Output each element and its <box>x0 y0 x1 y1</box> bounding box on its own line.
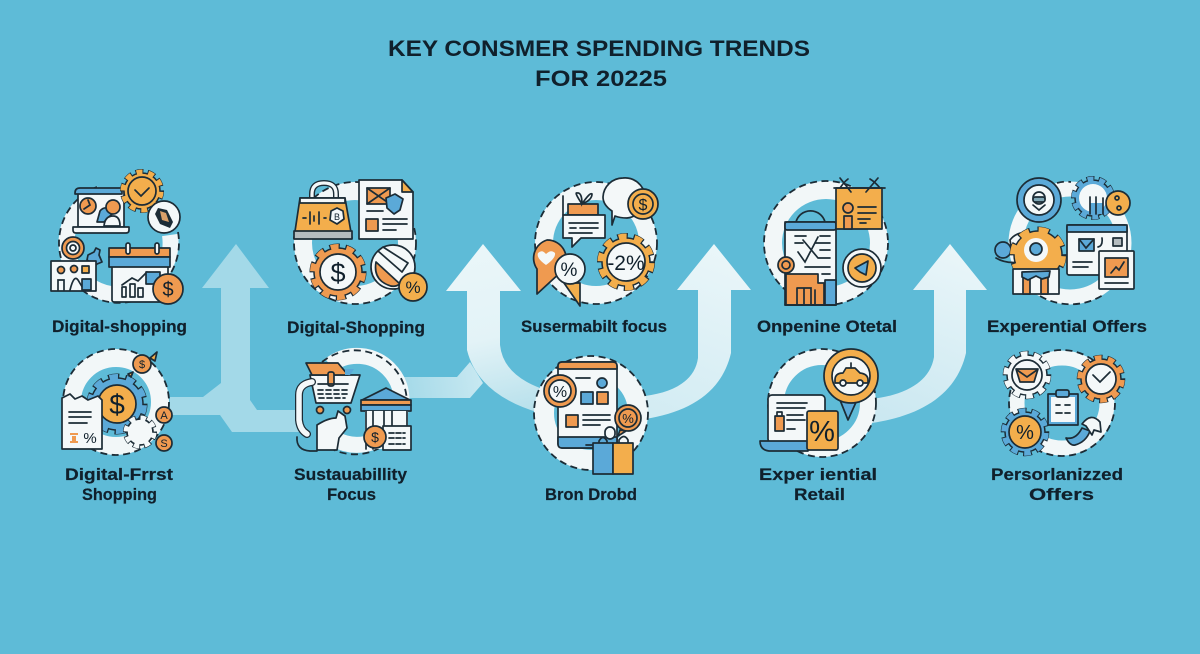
icon: coin: $ <box>371 429 379 445</box>
icon: percent card <box>807 411 838 450</box>
label <box>294 466 408 504</box>
icon: blue gear with percent: % <box>1016 422 1034 444</box>
panel: bottom 5 Personalized Offers <box>991 350 1123 504</box>
icon: heart bubble <box>534 240 566 294</box>
icon: percent badge: % <box>553 384 567 401</box>
ring <box>534 356 648 470</box>
icon: blue gear with coin <box>90 377 144 431</box>
icon: disc <box>843 249 881 287</box>
icon: percent coin <box>399 273 427 301</box>
panel: bottom 1 Digital-First Shopping <box>62 349 174 504</box>
panel: top 4 Onpenine Otetal <box>757 178 897 336</box>
icon: bank <box>361 388 411 449</box>
label: Experential Offers <box>987 318 1147 336</box>
ring <box>1009 350 1115 456</box>
ring <box>1016 182 1124 304</box>
icon: shopping bag <box>294 198 352 239</box>
icon: white disc <box>148 201 180 233</box>
label <box>991 466 1123 504</box>
icon: blue gear with percent <box>1004 411 1046 453</box>
icon: gift note <box>563 193 605 247</box>
icon: orange gear <box>1013 230 1063 280</box>
icon: laptop <box>760 395 825 451</box>
icon: white box with columns <box>1013 269 1059 294</box>
icon: blue gear with coin: $ <box>109 389 125 420</box>
icon: bag handle <box>312 183 336 200</box>
icon: receipt: % <box>83 430 97 447</box>
icon: coin <box>628 189 658 219</box>
title: FOR 20225 <box>535 66 667 91</box>
label: Digital-shopping <box>52 318 187 336</box>
label: Onpenine Otetal <box>757 318 897 336</box>
ring <box>294 182 416 304</box>
ring <box>768 349 876 457</box>
icon: percent bubble: % <box>622 411 634 426</box>
label: Susermabilt focus <box>521 318 667 336</box>
icon: outline gear <box>1074 179 1112 217</box>
ring <box>764 181 888 305</box>
panel: top 1 Digital-shopping <box>51 172 187 336</box>
label <box>759 466 877 504</box>
icon: handle base <box>297 437 317 451</box>
panel: bottom 3 Bron Drobd <box>534 356 648 504</box>
icon: shopping bags <box>593 427 633 474</box>
panel: top 5 Experential Offers <box>987 178 1147 336</box>
icon: helmet disc <box>371 245 415 289</box>
icon: badge <box>1017 178 1061 222</box>
icon: hand <box>317 411 347 450</box>
arrow: first up arrow with branches <box>170 244 300 432</box>
icon: white gear with envelope <box>1006 354 1048 396</box>
icon: calendar: $ <box>162 279 174 301</box>
icon: wrench <box>1066 417 1101 445</box>
icon: tablet <box>558 362 617 448</box>
label: Digital-Shopping <box>287 319 425 337</box>
icon: coin: $ <box>639 197 648 214</box>
icon: orange building <box>785 274 836 305</box>
icon: top coin with tie: $ <box>139 359 145 371</box>
ring <box>59 187 179 303</box>
icon: coin A <box>156 407 172 423</box>
icon: handle strip <box>299 382 312 434</box>
icon: window <box>1067 225 1127 275</box>
icon: document <box>785 222 836 305</box>
arrow: third curved up arrow <box>645 244 751 419</box>
icon: chart card <box>1099 251 1134 289</box>
arrow: fourth curved up arrow <box>872 244 987 423</box>
icon: coin <box>364 426 386 448</box>
panel: bottom 4 Experiential Retail <box>759 349 878 504</box>
icon: percent badge <box>544 375 576 407</box>
icon: handle strip fill <box>299 382 312 434</box>
icon: top coin with tie <box>128 352 157 377</box>
label: Retail <box>794 486 845 504</box>
icon: gear -2%: -2% <box>607 252 645 275</box>
icon: speech bubble <box>603 178 645 225</box>
label: Offers <box>1029 486 1094 504</box>
ring <box>322 350 407 454</box>
panel: top 3 Susermabilt focus <box>521 178 667 336</box>
label: Persorlanizzed <box>991 466 1123 484</box>
icon: yellow gear with check <box>123 172 161 210</box>
icon: percent card: % <box>809 416 835 448</box>
arrow: second curved up arrow <box>446 244 540 413</box>
icon: orange gear with clock <box>1080 358 1122 400</box>
icon: calendar <box>109 243 183 304</box>
icon: puzzle blob <box>87 248 102 266</box>
icon: shopping bag: B <box>334 212 340 222</box>
icon: gear -2% <box>600 236 652 288</box>
icon: coin A: A <box>160 410 168 422</box>
icon: receipt <box>62 394 102 449</box>
icon: orange gear with dollar: $ <box>330 258 346 288</box>
icon: percent bubble <box>615 405 641 436</box>
icon: laptop <box>73 188 129 233</box>
icon: orange gear with dollar <box>313 247 363 297</box>
icon: table <box>383 426 411 450</box>
ring <box>63 349 169 455</box>
label: Bron Drobd <box>545 486 637 504</box>
icon: target <box>62 237 84 259</box>
icon: coin <box>1106 191 1130 215</box>
icon: coin S <box>156 435 172 451</box>
icon: cloud <box>995 233 1036 262</box>
icon: map pin with car <box>824 349 878 403</box>
icon: board <box>51 261 96 291</box>
label: Digital-Frrst <box>65 466 174 484</box>
icon: map pin tip <box>840 400 857 420</box>
arrow: connector band to second arrow <box>400 362 483 398</box>
label: Exper iential <box>759 466 877 484</box>
icon: percent coin: % <box>405 278 421 297</box>
icon: coin S: S <box>160 438 168 450</box>
icon: cart <box>306 363 360 414</box>
icon: blue block <box>825 280 836 305</box>
icon: clipboard <box>1048 390 1078 425</box>
title <box>388 36 810 91</box>
panel: bottom 2 Sustainability Focus <box>294 350 411 504</box>
label <box>65 466 174 504</box>
icon: bag handle <box>796 211 825 222</box>
panel: top 2 Digital-Shopping <box>287 180 427 337</box>
title: KEY CONSMER SPENDING TRENDS <box>388 36 810 61</box>
icon: yellow board <box>834 178 885 229</box>
label: Shopping <box>82 486 157 504</box>
icon: document <box>359 180 413 239</box>
label: Focus <box>327 486 376 504</box>
icon: small white gear <box>126 418 154 446</box>
ring <box>535 182 657 304</box>
icon: percent bubble <box>555 254 585 306</box>
icon: small coin <box>778 257 794 273</box>
label: Sustauabillity <box>294 466 408 484</box>
icon: percent bubble: % <box>561 260 578 281</box>
